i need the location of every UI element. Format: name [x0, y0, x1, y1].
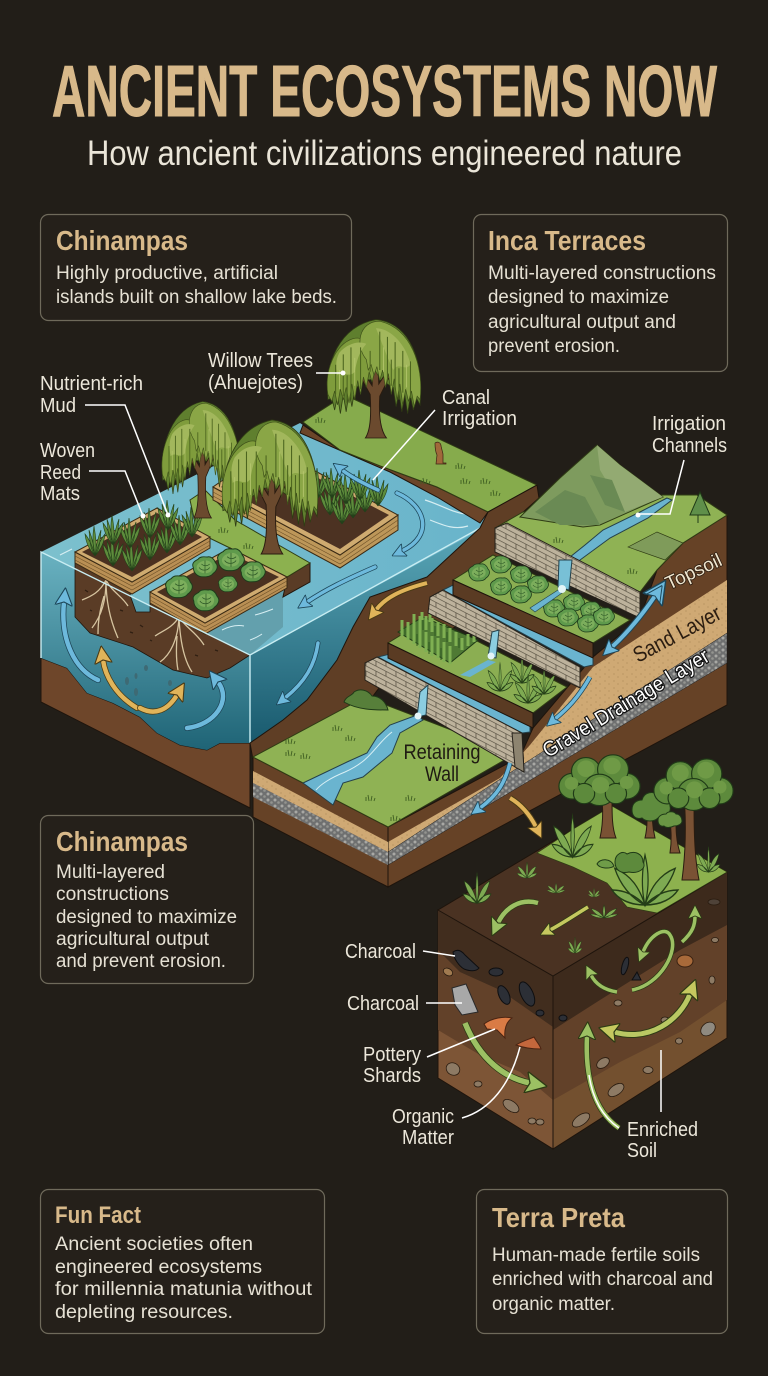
panel body: engineered ecosystems [55, 1257, 262, 1278]
inca terraces block [253, 445, 727, 887]
label: willow trees: Willow Trees [208, 350, 313, 372]
panel: chinampas intro [40, 214, 352, 320]
raft soil with roots [75, 560, 283, 696]
glass edges [41, 528, 480, 743]
mountain [520, 445, 663, 527]
corn block [398, 617, 478, 663]
understory plants [552, 815, 593, 857]
chinampa water block [41, 423, 488, 808]
Retaining Wall label [404, 741, 480, 786]
callout labels and leaders [40, 350, 727, 1162]
upper crop field [453, 555, 630, 658]
lettuce plot [150, 548, 287, 634]
willow trees [162, 319, 421, 554]
panel heading: Chinampas [56, 225, 188, 256]
middle wall [428, 585, 593, 688]
panel body: prevent erosion. [488, 336, 620, 357]
label: pottery shards: Shards [363, 1065, 421, 1087]
label: irrigation channels: Channels [652, 435, 727, 457]
label: willow trees [208, 350, 346, 394]
subtitle: How ancient civilizations engineered nature [87, 134, 682, 173]
lower retaining wall [365, 652, 530, 772]
label: canal irrigation [373, 387, 517, 480]
panel body: agricultural output [56, 929, 210, 950]
stratum labels [539, 550, 725, 762]
charcoal pieces [453, 950, 641, 1021]
flow arrows on strata [480, 596, 655, 808]
panel body: depleting resources. [55, 1302, 233, 1323]
panel body: Multi-layered [56, 862, 165, 883]
label: nutrient-rich mud: Mud [40, 395, 76, 417]
panel: inca terraces [474, 214, 728, 372]
stones [442, 899, 720, 1130]
grey shard [452, 984, 478, 1015]
label: nutrient-rich mud [40, 373, 170, 518]
small tree crown [632, 793, 670, 821]
panel body: designed to maximize [56, 907, 237, 928]
panel body: Human-made fertile soils [492, 1245, 700, 1266]
circulation arrows [63, 470, 423, 728]
label: nutrient-rich mud: Nutrient-rich [40, 373, 143, 395]
water side face [250, 528, 480, 743]
strata slab right face [388, 515, 727, 887]
roots [82, 580, 204, 672]
panel body: for millennia matunia without [55, 1279, 313, 1300]
label: enriched soil: Enriched [627, 1119, 698, 1141]
label: charcoal upper: Charcoal [345, 941, 416, 963]
Topsoil label: Topsoil [662, 550, 725, 595]
grass island [190, 490, 310, 597]
panel body: enriched with charcoal and [492, 1269, 713, 1290]
terra preta soil cube [438, 806, 727, 1149]
panel body: Ancient societies often [55, 1234, 253, 1255]
bush [344, 690, 388, 710]
label: pottery shards [363, 1029, 495, 1087]
panel body: Multi-layered constructions [488, 263, 716, 284]
panel: terra preta [476, 1190, 728, 1334]
soil base [41, 658, 250, 808]
yellow flow arrow [376, 583, 427, 610]
yellow arrow between terraces and terra preta [510, 798, 536, 827]
soil top plants [463, 862, 618, 953]
earth slope between water and terraces [250, 485, 539, 760]
fir [690, 492, 710, 523]
far reed plot [213, 447, 398, 568]
panel body: designed to maximize [488, 287, 669, 308]
water front face [41, 552, 250, 750]
label: enriched soil: Soil [627, 1140, 657, 1162]
lowest field [253, 697, 522, 827]
soil arrows [465, 902, 695, 1128]
panel body: Highly productive, artificial [56, 263, 278, 284]
smallest tree crown [658, 812, 682, 828]
pottery shards [484, 1017, 541, 1049]
reed plot [75, 500, 210, 594]
panel body [55, 1234, 313, 1323]
label: organic matter: Matter [402, 1127, 454, 1149]
label: organic matter [392, 1047, 520, 1149]
animal [435, 442, 446, 464]
label: pottery shards: Pottery [363, 1044, 421, 1066]
label: woven reed mats: Reed [40, 462, 81, 484]
label: charcoal lower: Charcoal [347, 993, 419, 1015]
small hill [628, 532, 683, 560]
water surface [41, 423, 488, 655]
label: woven reed mats: Woven [40, 440, 95, 462]
panel body [56, 263, 337, 308]
block front face [253, 757, 388, 887]
label: woven reed mats [40, 440, 146, 518]
back bank with grass [300, 395, 537, 523]
top soil [438, 806, 727, 976]
left face [438, 910, 553, 1149]
forest trees [552, 755, 733, 905]
label: canal irrigation: Irrigation [442, 408, 517, 430]
label: willow trees: (Ahuejotes) [208, 372, 303, 394]
middle field [388, 612, 567, 728]
panel body [488, 263, 716, 357]
panel body [56, 862, 237, 972]
panel heading: Chinampas [56, 826, 188, 857]
panel body: and prevent erosion. [56, 951, 226, 972]
label: organic matter: Organic [392, 1106, 454, 1128]
upper wall [414, 523, 640, 720]
label: charcoal lower [347, 993, 462, 1015]
Retaining Wall label: Wall [425, 763, 459, 786]
panel body: agricultural output and [488, 312, 676, 333]
Retaining Wall label: Retaining [404, 741, 480, 764]
panel body: constructions [56, 884, 169, 905]
label: irrigation channels: Irrigation [652, 413, 726, 435]
panel body [492, 1245, 713, 1315]
Gravel Drainage Layer label: Gravel Drainage Layer [539, 645, 713, 762]
right face [553, 872, 727, 1149]
panel body: organic matter. [492, 1294, 615, 1315]
soil speckle [85, 590, 218, 656]
top grass [537, 806, 727, 913]
top field with mountain [495, 445, 727, 592]
panel heading: Inca Terraces [488, 225, 646, 256]
panel heading: Fun Fact [55, 1202, 141, 1229]
Sand Layer label: Sand Layer [629, 600, 725, 667]
panel heading: Terra Preta [492, 1202, 625, 1233]
label: canal irrigation: Canal [442, 387, 490, 409]
label: irrigation channels [636, 413, 727, 518]
sand layer [388, 580, 727, 852]
label: woven reed mats: Mats [40, 483, 80, 505]
panel: chinampas detail [40, 816, 254, 984]
panel body: islands built on shallow lake beds. [56, 287, 337, 308]
label: enriched soil [589, 1050, 698, 1162]
gravel layer [388, 633, 727, 865]
panel: fun fact [40, 1190, 324, 1334]
